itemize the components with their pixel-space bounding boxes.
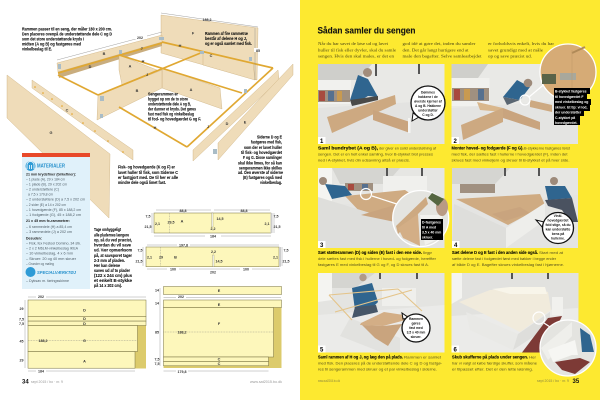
text: sides D and E note: ad. Den øverste af siderne bbox=[238, 170, 284, 175]
material list: – 6 rammedele (H) a 85,4 cm bbox=[26, 224, 73, 229]
caption 6: Her bbox=[529, 354, 537, 360]
material list: – 2 understøttere (C) bbox=[26, 186, 60, 192]
heading: special tool: SPECIALVÆRKTØJ bbox=[37, 270, 77, 275]
material list: – Fisk, fex Festool Domino, 34 stk. bbox=[26, 240, 81, 246]
diagram: cutting plan sheet 2: 202 bbox=[178, 295, 184, 299]
caption 1: ned i A-stykket, hvis din udsavning altså er præcis. bbox=[318, 158, 410, 162]
text: foot and head board note: mindre dele også limet fast. bbox=[118, 180, 166, 185]
special tool list: – Dyksav m. føringsskinne bbox=[26, 278, 70, 283]
number tag 5: 5 bbox=[320, 348, 324, 354]
diagram: part B: 21,5 bbox=[136, 260, 142, 264]
diagram: part A: 21,5 bbox=[274, 225, 280, 229]
part letters: E bbox=[244, 120, 247, 124]
material list: – 3 rammedele (J) a 202 cm bbox=[26, 229, 73, 234]
title: Sådan samler du sengen bbox=[318, 26, 416, 36]
diagram: part A: A bbox=[181, 220, 184, 224]
diagram: part A: 29,5 bbox=[168, 220, 174, 224]
diagram: part A: 2,1 bbox=[155, 222, 160, 226]
part letters: D bbox=[89, 65, 92, 69]
caption 2: Monter hoved- og fodgærde (F og G). bbox=[452, 146, 524, 150]
diagram: cutting plan sheet 1: D bbox=[83, 308, 86, 312]
number tag 1: 1 bbox=[320, 139, 324, 145]
text: sides D and E note: Siderne D og E bbox=[257, 134, 282, 140]
text: frame placement note: Den placeres ovenpå de understøttende dele C og D bbox=[22, 32, 112, 36]
part letters: H bbox=[179, 44, 182, 48]
diagram: part B: 7,5 bbox=[284, 248, 288, 252]
part letters: A bbox=[190, 88, 193, 92]
panel G: footboard bbox=[7, 75, 110, 218]
diagram: part B: 100 bbox=[243, 268, 249, 272]
speech bubble: photo 4: hovedgærdet bbox=[548, 218, 569, 222]
part letters: J bbox=[207, 125, 209, 129]
text: cutting advice: (122 x 244 cm) plus bbox=[94, 273, 133, 278]
diagram: part A: 88,8 bbox=[240, 209, 248, 213]
material list: Desuden: bbox=[26, 236, 42, 240]
material list: – 1 plade (B), 29 x 202 cm bbox=[26, 182, 68, 186]
text: cross support note: Sengerammen er bbox=[148, 92, 178, 96]
text: frame rails note bbox=[205, 31, 252, 46]
text: sides D and E note: F og G. Disse samlinger bbox=[243, 155, 282, 160]
part letters: F bbox=[192, 32, 195, 36]
diagram: part B: 197,8 bbox=[179, 244, 188, 248]
diagram: part A bbox=[144, 209, 280, 238]
icon: materials bbox=[26, 161, 36, 171]
diagram: cutting plan sheet 2: 14 bbox=[155, 302, 159, 306]
text: frame placement note: midten (A og B) og fastgøres med bbox=[22, 42, 81, 46]
part letters: H bbox=[142, 60, 145, 64]
panel B: front middle bbox=[97, 70, 162, 120]
diagram: part B: 100 bbox=[170, 268, 176, 272]
diagram: cutting plan sheet 1: 7,5 bbox=[19, 318, 24, 322]
diagram: cutting plan sheet 2: 7,5 bbox=[154, 358, 160, 362]
photo 4: parts D and E on other side bbox=[452, 168, 578, 249]
diagram: cutting plan sheet 1: 45 bbox=[20, 340, 24, 344]
diagram: part B: 2,1 bbox=[147, 256, 152, 260]
diagram: cutting plan sheet 2: C bbox=[218, 358, 221, 362]
caption 6: Skub skufferne på plads under sengen. bbox=[452, 354, 528, 360]
text: cutting advice: på 14 x 202 cm). bbox=[94, 283, 122, 288]
diagram: part B: 29 bbox=[159, 256, 163, 260]
diagram: cutting plan sheet 2: E bbox=[218, 303, 221, 307]
text: frame placement note: vinkelbeslag til E. bbox=[22, 46, 52, 52]
intro text: savet grundigt med at måle bbox=[488, 48, 543, 52]
caption 5 bbox=[318, 354, 443, 372]
part letters: G bbox=[50, 131, 53, 135]
footer left: web address: www.sat2015.bo.dk bbox=[250, 380, 282, 384]
diagram: cutting plan sheet 1: 184 bbox=[38, 370, 44, 374]
part letters: H bbox=[154, 126, 157, 130]
footer right: web address: www.sat2015.bo.dk bbox=[318, 379, 340, 383]
intro text: den. Det går langt hurtigere end at bbox=[402, 48, 469, 52]
speech bubble: photo 1 bbox=[411, 86, 445, 121]
black label: B-piece note: B-stykket fastgøres bbox=[555, 90, 587, 94]
caption 3: Begge bbox=[423, 250, 433, 255]
diagram: part A: 7,5 bbox=[274, 214, 278, 218]
text: sides D and E note: fastgøres med fisk, bbox=[251, 140, 282, 144]
caption 4: sætte delene fast i fodgærdet først med bøkker i begge ender bbox=[452, 256, 557, 261]
material list: – 1 hovedgærde (F), 85 x 188,2 cm bbox=[26, 207, 82, 212]
black label: B-piece note: skruer. Et tip: vi lod, bbox=[555, 105, 587, 109]
caption 2: B-stykkerne fastgøres først bbox=[524, 146, 571, 150]
diagram: cutting plan sheet 1: D bbox=[83, 317, 86, 321]
caption 2: skrues fast med vinkeljern og skruer til B-stykket et på hver side. bbox=[452, 158, 570, 162]
material list: 21 mm krydsfiner (birkefiner): bbox=[26, 172, 76, 176]
panel D: rear lower side bbox=[58, 42, 162, 78]
diagram: part B bbox=[136, 244, 290, 274]
caption 5: res til sengerammen med skruer og et par vinkelbeslag i siderne. bbox=[318, 366, 437, 372]
number tag 4: 4 bbox=[454, 243, 458, 249]
text: frame rails note: og er også samlet med fisk. bbox=[205, 41, 252, 46]
black label: B-piece note: med vinkelbeslag og bbox=[555, 100, 588, 104]
heading: materials: MATERIALER bbox=[37, 164, 65, 170]
material list: – 2 understøttere (D) a 7,5 x 202 cm bbox=[26, 196, 86, 202]
caption 6: har vi valgt at købe færdige skuffer, som målene bbox=[452, 360, 538, 366]
speech bubble: photo 1: Dømmes bbox=[421, 90, 435, 94]
part letters: B bbox=[103, 52, 106, 56]
diagram: part B: 2,2 bbox=[211, 250, 216, 254]
exploded 3D bed drawing bbox=[7, 13, 293, 218]
text: cross support note bbox=[148, 92, 201, 122]
material list: – Skruer: 20 og 40 mm skruer bbox=[26, 256, 77, 261]
caption 2 bbox=[452, 146, 571, 162]
photo 6: finished bed bbox=[452, 273, 596, 376]
footer left: page number and issue: 34 bbox=[22, 380, 29, 386]
number tag 3: 3 bbox=[320, 243, 324, 249]
speech bubble: photo 1: A og B. Hakkene bbox=[415, 104, 441, 108]
small ring pointer with connector bbox=[520, 82, 547, 105]
panel C: front support with holes bbox=[32, 80, 133, 160]
red top bar bbox=[22, 153, 90, 157]
text: sides D and E note: som der er lavet huller bbox=[244, 145, 282, 150]
black label: B-piece note: C-stykket på bbox=[555, 116, 575, 120]
photo 1: assembling the cross bbox=[318, 64, 445, 145]
text: cross support note: der danner et kryds. Det gøres bbox=[148, 106, 197, 112]
material list: – 2 sider (E) a 14 x 202 cm bbox=[26, 202, 67, 207]
diagram: cutting plan sheet 1 bbox=[19, 294, 146, 374]
caption 4 bbox=[452, 250, 564, 267]
text: sides D and E note: vinkelbeslag. bbox=[260, 180, 282, 185]
diagram: cutting plan sheet 2 bbox=[154, 288, 282, 374]
footer right: issue and page number: 35 bbox=[572, 379, 580, 385]
metal brackets bbox=[58, 37, 252, 154]
text: cross support note: understøttende dele A og B, bbox=[148, 102, 191, 106]
text: frame rails note: Rammen af fire rammetræ bbox=[205, 31, 248, 36]
text: cutting advice: 2-3 mm af pladen. bbox=[94, 258, 125, 263]
panel E: right outer side bbox=[218, 64, 293, 160]
caption 1: sengen. Det er en helt enkel samling, hvor B-stykket blot presses bbox=[318, 152, 433, 156]
part letters: A bbox=[129, 64, 132, 68]
bed frame rails bbox=[58, 42, 273, 147]
diagram: cutting plan sheet 1: G bbox=[83, 339, 86, 343]
diagram: cutting plan sheet 1: D bbox=[83, 322, 86, 326]
diagram: cutting plan sheet 2: C bbox=[218, 362, 221, 366]
speech bubble: photo 5 bbox=[402, 313, 430, 342]
text: cutting advice: ud. Vær opmærksom bbox=[94, 248, 132, 252]
speech bubble: photo 4: hullerne. bbox=[551, 236, 565, 240]
part letters: C bbox=[66, 108, 69, 112]
text: sides D and E note: sengerammen ikke skilles bbox=[239, 166, 283, 170]
text: frame rails note: består af delene H og J, bbox=[205, 36, 247, 41]
caption 6: er tilpasset efter. Det er den lette løsning. bbox=[452, 366, 533, 372]
diagram: cutting plan sheet 2: 7,5 bbox=[154, 362, 160, 366]
diagram: part A: 14,5 bbox=[216, 217, 224, 221]
intro text: god idé at gøre det, inden du samler bbox=[402, 41, 476, 47]
black label: D-piece note: 3,5 x 40 mm bbox=[422, 230, 441, 234]
text: cross support note: bygget op om de to store bbox=[148, 96, 189, 102]
right page background bbox=[300, 0, 600, 400]
text: frame placement note: som det store understøttende kryds i bbox=[22, 36, 84, 42]
diagram: part B: 2,1 bbox=[273, 256, 278, 260]
part letters: C bbox=[210, 54, 213, 58]
caption 5: Saml rammen af H og J, og læg den på plads. bbox=[318, 354, 403, 360]
dimensions on 3D drawing bbox=[57, 13, 262, 80]
small ring pointer with connector bbox=[360, 188, 400, 205]
text: sides D and E note bbox=[238, 134, 284, 185]
intro text: sengen. Hvis den skal males, er det en bbox=[318, 54, 395, 60]
caption 3: Sæt støtterammen (D) og siden (E) fast i den ene side. bbox=[318, 250, 422, 255]
speech bubble: photo 1: øverste kjerner af bbox=[414, 100, 443, 104]
speech bubble: photo 5: Rammen bbox=[409, 317, 423, 321]
caption 4: Start med at bbox=[539, 250, 564, 255]
footer left: page number and issue: sept 2015 / bo · nr. 9 bbox=[31, 380, 63, 384]
footer left: page number and issue bbox=[22, 380, 63, 386]
black label: D-piece note bbox=[421, 219, 443, 240]
black label: B-piece note: hovedgærdet. bbox=[555, 121, 577, 125]
dimensions on 3D drawing: 188,2 bbox=[202, 18, 212, 22]
diagram: part B: 21,5 bbox=[282, 260, 290, 264]
black label: D-piece note: til A med bbox=[422, 226, 436, 230]
material list: – 1 plade (A), 29 x 184 cm bbox=[26, 176, 66, 182]
caption 4: af både D og E. Bagefter skrues vinkelbeslag fast i hjørnerne. bbox=[452, 262, 564, 267]
footer right: issue and page number: sept 2015 / bo · nr. 9 bbox=[537, 379, 569, 383]
text: cutting advice: op, så du ved præcist, bbox=[94, 238, 132, 242]
diagram: part A: 184 bbox=[210, 234, 216, 238]
caption 4: Sæt delene D og E fast i den anden side også. bbox=[452, 250, 538, 255]
number tag 6: 6 bbox=[454, 348, 458, 354]
caption 3: dele sættes fast med fisk i hullerne i hoved- og fodgærde, hereffter bbox=[318, 256, 437, 261]
speech bubble: photo 5: gøres bbox=[412, 322, 421, 326]
text: cutting advice: hvordan du vil save bbox=[94, 242, 132, 248]
diagram: cutting plan sheet 1: 188,2 bbox=[38, 339, 48, 343]
text: cross support note: til fod- og hovedgærdet G og F. bbox=[148, 116, 201, 122]
diagram: cutting plan sheet 2: 188,2 bbox=[178, 330, 186, 334]
diagram: part B: 7,5 bbox=[138, 248, 142, 252]
speech bubble: photo 4: kan understøtte bbox=[546, 228, 571, 232]
text: foot and head board note: lavet huller til fisk, som Siderne C bbox=[118, 170, 178, 175]
diagram: part A: 7,5 bbox=[146, 214, 150, 218]
caption 2: med fisk, der sættes fast i hullerne i hovedgærdet (F), inden det bbox=[452, 152, 568, 156]
photo 5: assembling the frame bbox=[318, 273, 444, 354]
caption 3 bbox=[318, 250, 437, 267]
icon: special tool bbox=[26, 267, 36, 277]
diagram: cutting plan sheet 1: 29 bbox=[20, 307, 24, 311]
speech bubble: photo 4: bens på bbox=[552, 232, 564, 236]
text: cutting advice: alle pladernes længere bbox=[94, 232, 130, 237]
intro text: male den bagefter. Selve samlearbejdet bbox=[402, 54, 482, 58]
text: foot and head board note: er fastgjort med. De til her er alle bbox=[118, 175, 179, 180]
diagram: part B: 14,5 bbox=[216, 260, 222, 264]
intro text: huller til fisk eller dyvler, skal du samle bbox=[318, 48, 396, 54]
panel D: right side bbox=[193, 70, 279, 161]
left page background bbox=[0, 0, 300, 400]
text: cutting advice bbox=[94, 227, 133, 288]
number tag 6 bbox=[452, 346, 459, 354]
diagram: cutting plan sheet 2: 179,8 bbox=[178, 370, 186, 374]
text: cross support note: fast med fisk og vinkelbeslag bbox=[148, 112, 194, 116]
black label: D-piece note: D-fastgøres bbox=[422, 220, 441, 224]
black label: B-piece note: til hovedgærdet F bbox=[555, 95, 583, 99]
number tag 2: 2 bbox=[454, 139, 458, 145]
material list: – Grunder og maling bbox=[26, 261, 54, 266]
caption 6 bbox=[452, 354, 538, 372]
text: sides D and E note: skal ikke limes, for så kan bbox=[238, 160, 282, 166]
part letters bbox=[50, 32, 247, 135]
part letters: J bbox=[146, 73, 148, 77]
text: cutting advice: Her kan delene bbox=[94, 263, 121, 268]
diagram: part B: 202 bbox=[210, 270, 216, 274]
diagram: cutting plan sheet 2: F bbox=[218, 322, 221, 326]
black label: B-piece note bbox=[554, 88, 591, 125]
speech bubble: photo 4: Vinkl. bbox=[554, 214, 562, 218]
photo 2: mounting head and foot board bbox=[452, 44, 596, 145]
speech bubble: photo 1: hakkene i de bbox=[418, 95, 438, 99]
caption 1 bbox=[318, 146, 437, 162]
diagram: part A: 21,5 bbox=[144, 225, 152, 229]
speech bubble: photo 1: understøtter bbox=[418, 108, 438, 112]
part letters: J bbox=[140, 46, 143, 50]
footer right: issue and page number bbox=[537, 379, 580, 385]
caption 3: fastgøres E med vinkelbeslag til G og F, og D skrues fast til A. bbox=[318, 262, 429, 267]
diagram: cutting plan sheet 1: 29 bbox=[20, 358, 24, 362]
speech bubble: photo 5: fast med bbox=[409, 326, 423, 330]
intro text: Når du har savet de løse ud og lavet bbox=[318, 41, 389, 46]
part letters: B bbox=[136, 89, 139, 93]
speech bubble: photo 1: C og D. bbox=[422, 113, 434, 117]
diagram: cutting plan sheet 1: 202 bbox=[38, 295, 44, 299]
part letters: D bbox=[226, 122, 229, 126]
diagram: part E strip: 14 bbox=[155, 288, 159, 292]
dimensions on 3D drawing: 85 bbox=[256, 49, 260, 53]
text: frame placement note: Rammen passer til en seng, der måler 180 x 200 cm. bbox=[22, 26, 112, 32]
intro text: op og save præcist ud. bbox=[488, 54, 532, 58]
diagram: cutting plan sheet 1: A bbox=[83, 360, 86, 364]
diagram: part E strip: E bbox=[218, 289, 221, 293]
diagram: cutting plan sheet 1: 7,5 bbox=[19, 322, 24, 326]
callout circle: bracket detail bbox=[540, 44, 596, 100]
material list: 21 x 45 mm fx-rammetræ: bbox=[26, 218, 70, 223]
text: sides D and E note: til fisk- og hovedgærdet bbox=[241, 150, 283, 155]
callout circle: screw detail bbox=[393, 190, 449, 246]
caption 5: Rammen er samlet bbox=[404, 354, 442, 360]
material list: a 7,5 x 179,8 cm bbox=[28, 192, 54, 196]
caption 1: der giver en solid understøtning af bbox=[379, 146, 437, 150]
caption 5: med fisk. Den placeres på de understøttende dele C og D og fastgø- bbox=[318, 360, 443, 366]
material list: – 10 vinkelbeslag, 4 x 6 mm bbox=[26, 250, 74, 256]
diagram: part A: 2,1 bbox=[264, 222, 270, 226]
number tag 2 bbox=[452, 137, 459, 145]
diagram: cutting plan sheet 2: 85 bbox=[155, 330, 159, 334]
text: frame placement note bbox=[22, 26, 112, 52]
diagram: part A: 2,2 bbox=[210, 227, 216, 231]
photo 3: support frame and side bbox=[318, 168, 449, 249]
small ring pointer with connector bbox=[533, 312, 550, 327]
intro text bbox=[318, 41, 555, 60]
material list: – 2 x 2 M6LM-vinkelbeslag IKEA bbox=[26, 246, 78, 250]
diagram: part A: 88,8 bbox=[180, 209, 186, 213]
black label: B-piece note: der understøtter bbox=[555, 110, 582, 114]
speech bubble: photo 4: fold stige, så du bbox=[545, 223, 571, 227]
diagram: part B: B bbox=[174, 256, 177, 260]
text: cutting advice: Tage omhyggeligt bbox=[94, 227, 121, 232]
speech bubble: photo 5: 3,5 x 40 mm bbox=[407, 330, 425, 334]
text: foot and head board note: Fisk- og hovedgærde (K og F) er bbox=[118, 164, 175, 170]
panel: materials bbox=[22, 153, 90, 289]
panel A: front right half bbox=[162, 68, 222, 109]
panel B: rear long side bbox=[57, 35, 162, 72]
material list: – 1 fodgærde (G), 45 x 188,2 cm bbox=[26, 212, 82, 217]
text: cutting advice: på, at savsporet tager bbox=[94, 253, 132, 258]
text: sides D and E note: (E) fastgøres også med bbox=[243, 175, 282, 180]
panel A: rear left half bbox=[119, 55, 157, 85]
caption 1: Saml bundrybet (A og B), bbox=[318, 146, 378, 150]
panel F: headboard bbox=[161, 15, 258, 80]
panel C: rear support bbox=[203, 52, 255, 80]
black label: D-piece note: skruer. bbox=[422, 236, 433, 240]
text: cutting advice: et enkelt E-stykke bbox=[94, 278, 133, 283]
callout circle: drawer detail bbox=[540, 320, 596, 376]
text: foot and head board note bbox=[118, 164, 179, 185]
speech bubble: photo 4 bbox=[536, 212, 574, 244]
intro text: er forholdsvis enkelt, hvis du har bbox=[488, 41, 555, 47]
material list bbox=[26, 172, 86, 266]
dimensions on 3D drawing: 202 bbox=[137, 36, 143, 40]
diagram: part E strip bbox=[155, 286, 282, 294]
text: cutting advice: saves ud af to plader bbox=[94, 268, 130, 273]
speech bubble: photo 5: skruer. bbox=[411, 335, 421, 339]
